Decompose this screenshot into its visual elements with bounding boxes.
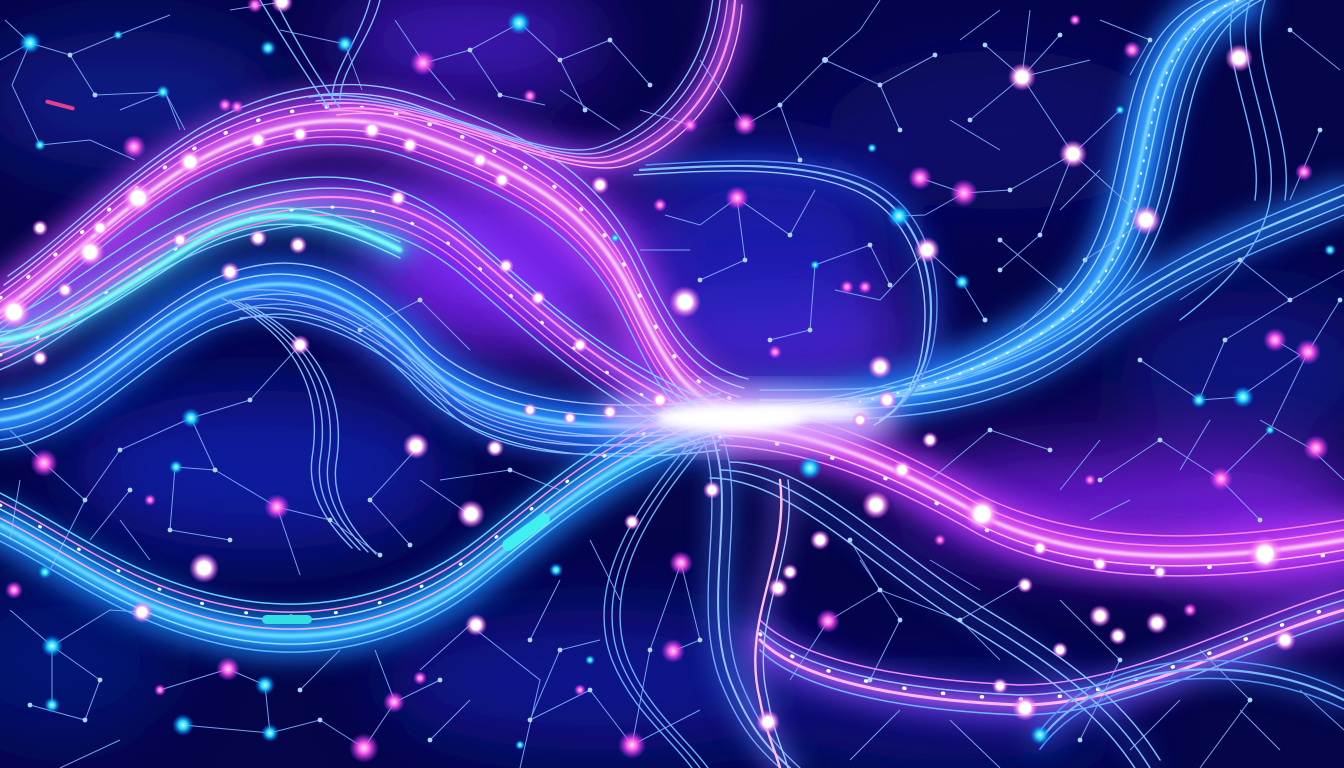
strands: lower left stream	[0, 393, 720, 652]
strands: blue middle stream	[0, 208, 724, 554]
cyan capsules	[45, 99, 552, 624]
strands: right rising stream	[680, 0, 1344, 420]
strands: pink upper stream	[0, 85, 748, 442]
strands: top loops and falling strands	[260, 0, 1286, 768]
central burst of light	[600, 388, 900, 448]
strands: right lower pink stream	[710, 405, 1344, 768]
